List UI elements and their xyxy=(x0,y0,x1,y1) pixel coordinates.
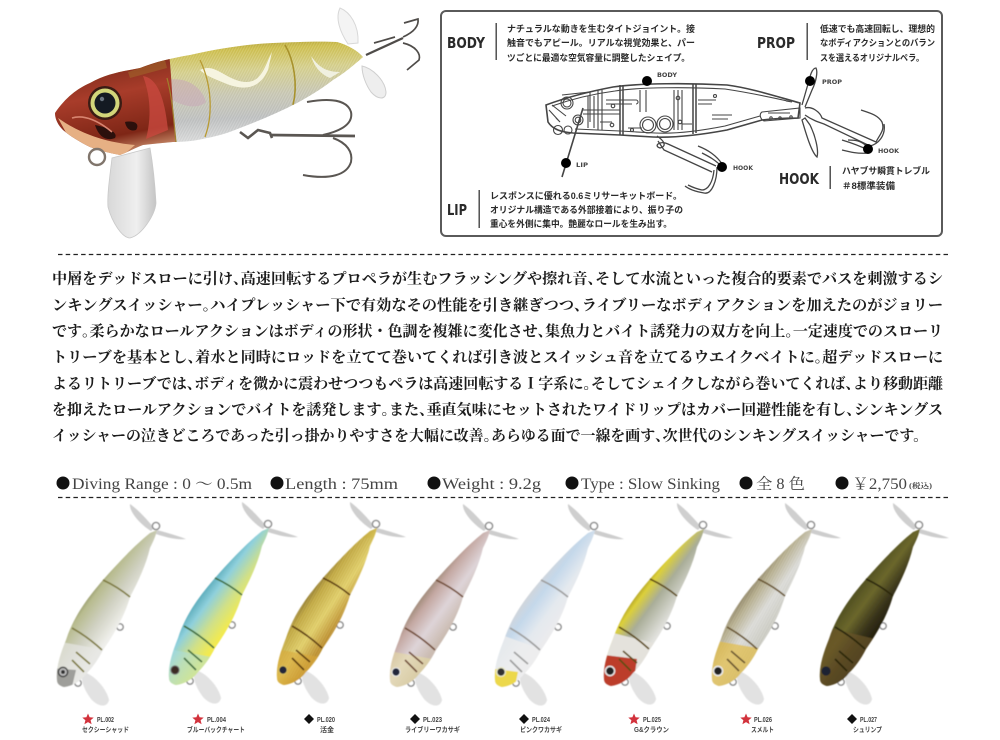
lure lip xyxy=(108,148,156,238)
parts diagram panel xyxy=(441,11,942,236)
belly treble hook xyxy=(240,100,355,177)
body label block xyxy=(447,23,695,63)
lure body xyxy=(55,42,363,155)
description paragraph: です。柔らかなロールアクションはボディの形状・色調を複雑に変化させ、集魚力とバイト誘発力の双方を向上。一定速度でのスローリ xyxy=(52,322,943,340)
tail treble hook xyxy=(366,19,419,70)
caption PL.020: PL.020 xyxy=(317,717,335,724)
lure eye xyxy=(88,86,122,120)
spec: weight: Weight : 9.2g xyxy=(442,476,541,493)
description paragraph: イッシャーの泣きどころであった引っ掛かりやすさを大幅に改善。あらゆる面で一線を画す、次世代のシンキングスイッシャーです。 xyxy=(52,426,928,444)
spec: price xyxy=(836,476,933,493)
hook label block: HOOK xyxy=(779,170,820,188)
callout: belly hook: HOOK xyxy=(733,165,753,172)
lure PL.025 xyxy=(597,503,733,705)
callout: tail hook xyxy=(863,144,899,155)
caption PL.020 xyxy=(304,714,335,734)
description paragraph xyxy=(52,270,943,444)
description paragraph: 中層をデッドスローに引け、高速回転するプロペラが生むフラッシングや擦れ音、そして水流といった複合的要素でバスを刺激するシ xyxy=(52,270,943,288)
propeller blades xyxy=(338,8,386,98)
lure PL.023 xyxy=(383,504,519,706)
colour captions xyxy=(82,714,882,734)
callout: tail hook: HOOK xyxy=(878,148,899,155)
callout: body: BODY xyxy=(657,72,678,79)
prop label block: スを選えるオリジナルペラ。 xyxy=(820,52,924,63)
lip label block: 重心を外側に集中。艶麗なロールを生み出す。 xyxy=(490,218,672,229)
body label block: 触音でもアピール。リアルな視覚効果と、パー xyxy=(507,37,695,48)
spec: colours: 全 8 色 xyxy=(756,475,805,493)
caption PL.023: ライブリーワカサギ xyxy=(405,725,460,734)
panel frame xyxy=(441,11,942,236)
description paragraph: を抑えたロールアクションでバイトを誘発します。また、垂直気味にセットされたワイドリップはカバー回避性能を有し、シンキングス xyxy=(52,400,943,418)
lip ring xyxy=(89,149,105,165)
hook label block: ハヤブサ瞬貫トレブル xyxy=(842,165,930,176)
description paragraph: トリーブを基本とし、着水と同時にロッドを立てて巻いてくれば引き波とスイッシュ音を立てるウエイクベイトに 。超デッドスローに xyxy=(52,348,943,366)
lure cutaway outline xyxy=(546,84,800,137)
description paragraph: よるリトリーブでは、ボディを微かに震わせつつもペラは高速回転するＩ字系に。そしてシェイクしながら巻いてくれば、より移動距離 xyxy=(52,374,943,392)
description paragraph: ンキングスイッシャー。ハイプレッシャー下で有効なその性能を引き継ぎつつ 、ライブリーなボディアクションを加えたのがジョリー xyxy=(52,296,943,314)
caption PL.026: スメルト xyxy=(751,726,774,734)
hero lure photo illustration xyxy=(50,8,419,238)
belly hook outline xyxy=(657,136,723,193)
caption PL.024: PL.024 xyxy=(532,717,550,724)
hook label block xyxy=(779,165,930,191)
lip label block: オリジナル構造である外部接着により、振り子の xyxy=(490,204,683,215)
prop label block xyxy=(757,23,935,63)
caption PL.023 xyxy=(405,714,460,734)
caption PL.004: ブルーバックチャート xyxy=(187,725,245,734)
caption PL.004 xyxy=(187,714,245,734)
callout: lip: LIP xyxy=(576,162,589,169)
spec: diving range: Diving Range : 0 〜 0.5m xyxy=(72,476,252,493)
prop label block: 低速でも高速回転し、理想的 xyxy=(820,23,935,34)
caption PL.025: PL.025 xyxy=(643,717,661,724)
caption PL.025 xyxy=(628,714,669,734)
caption PL.026 xyxy=(740,714,774,734)
lure PL.004 xyxy=(162,502,298,704)
caption PL.023: PL.023 xyxy=(423,717,442,724)
caption PL.027 xyxy=(847,714,882,734)
body label block: BODY xyxy=(447,34,486,52)
callout: prop xyxy=(805,76,843,86)
caption PL.002 xyxy=(82,714,129,734)
lure PL.027 xyxy=(813,503,949,705)
callout: lip xyxy=(561,108,589,177)
spec: colours xyxy=(740,475,805,493)
callout: prop: PROP xyxy=(822,79,843,86)
caption PL.004: PL.004 xyxy=(207,717,226,724)
lure PL.020 xyxy=(270,502,406,704)
caption PL.027: PL.027 xyxy=(860,717,877,724)
caption PL.027: シュリンプ xyxy=(853,726,882,734)
callout: body xyxy=(642,72,678,86)
spec: price: (税込) xyxy=(909,481,933,490)
lure PL.024 xyxy=(488,504,624,706)
caption PL.002: PL.002 xyxy=(97,717,114,724)
lip label block xyxy=(447,190,683,229)
caption PL.024: ピンクワカサギ xyxy=(520,725,562,734)
lure colour lineup xyxy=(50,502,949,706)
lip label block: レスポンスに優れる0.6ミリサーキットボード。 xyxy=(490,190,682,201)
lip label block: LIP xyxy=(447,201,467,219)
caption PL.025: G&クラウン xyxy=(634,725,669,734)
caption PL.020: 活金 xyxy=(320,725,334,734)
caption PL.026: PL.026 xyxy=(754,717,772,724)
spec row xyxy=(56,475,933,493)
caption PL.024 xyxy=(519,714,562,734)
spec: price: ￥2,750 xyxy=(852,476,907,493)
lure PL.026 xyxy=(705,503,841,705)
tail hook outline xyxy=(805,108,884,153)
body label block: ツごとに最適な空気容量に調整したシェイプ。 xyxy=(507,52,690,63)
prop label block: なボディアクションとのバラン xyxy=(820,37,935,48)
spec: length: Length : 75mm xyxy=(285,476,398,493)
prop blades outline xyxy=(802,68,818,157)
hook label block: ＃8標準装備 xyxy=(842,180,895,191)
lure PL.002 xyxy=(50,504,186,706)
caption PL.002: セクシーシャッド xyxy=(82,725,129,734)
callout: belly hook xyxy=(717,162,753,172)
spec: type: Type : Slow Sinking xyxy=(581,476,720,493)
body label block: ナチュラルな動きを生むタイトジョイント。接 xyxy=(507,23,695,34)
prop label block: PROP xyxy=(757,34,795,52)
